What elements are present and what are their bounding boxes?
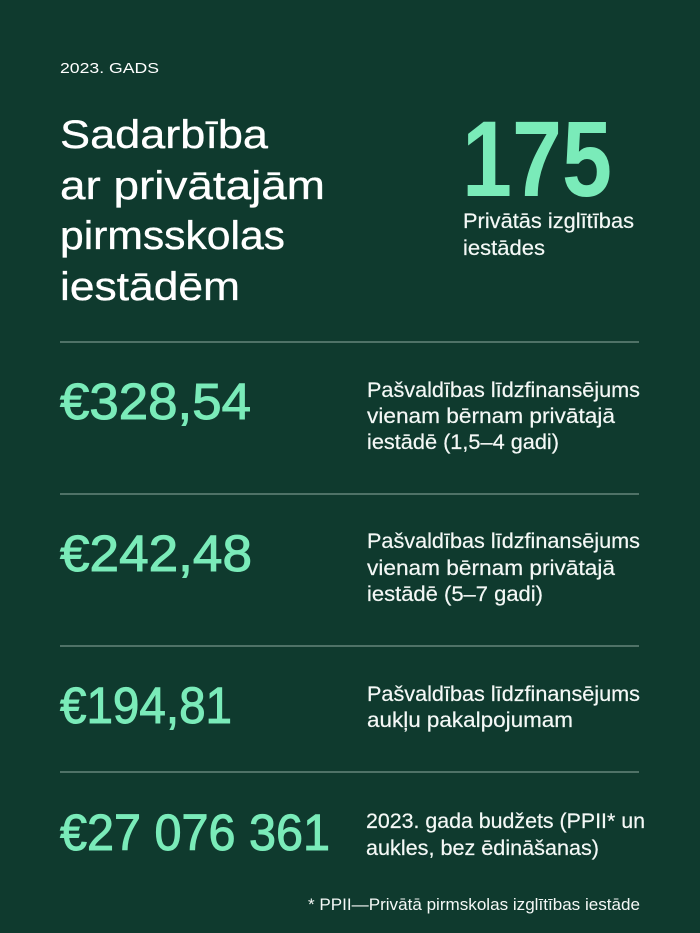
description — [367, 683, 640, 732]
stat caption — [463, 210, 634, 260]
description: 2023. gada budžets (PPII* un — [366, 810, 645, 833]
title: pirmsskolas — [60, 214, 285, 258]
description — [367, 379, 640, 454]
stat caption: iestādes — [463, 237, 545, 260]
row: co-financing age 1.5–4 — [60, 373, 640, 454]
description: vienam bērnam privātajā — [367, 557, 615, 580]
description: aukļu pakalpojumam — [367, 709, 573, 732]
description — [366, 810, 645, 860]
description: Pašvaldības līdzfinansējums — [367, 683, 640, 706]
amount: €328,54 — [60, 373, 251, 430]
description: iestādē (1,5–4 gadi) — [367, 431, 559, 454]
footnote: * PPII—Privātā pirmskolas izglītības iestāde — [308, 895, 640, 914]
row: childminder services — [60, 677, 640, 734]
description: Pašvaldības līdzfinansējums — [367, 530, 640, 553]
amount: €194,81 — [60, 677, 232, 734]
number 175: 175 — [462, 98, 612, 219]
amount: €27 076 361 — [60, 804, 330, 861]
description: iestādē (5–7 gadi) — [367, 583, 543, 606]
description: aukles, bez ēdināšanas) — [366, 837, 599, 860]
title: iestādēm — [60, 265, 240, 309]
amount: €242,48 — [60, 525, 252, 582]
year label: 2023. GADS — [60, 60, 159, 77]
description: Pašvaldības līdzfinansējums — [367, 379, 640, 402]
row: co-financing age 5–7 — [60, 525, 640, 606]
title: ar privātajām — [60, 164, 325, 208]
stat: private institutions — [462, 98, 634, 260]
title — [60, 113, 325, 309]
description — [367, 530, 640, 606]
stat caption: Privātās izglītības — [463, 210, 634, 233]
row: 2023 budget — [60, 804, 645, 861]
description: vienam bērnam privātajā — [367, 405, 615, 428]
title: Sadarbība — [60, 113, 269, 157]
